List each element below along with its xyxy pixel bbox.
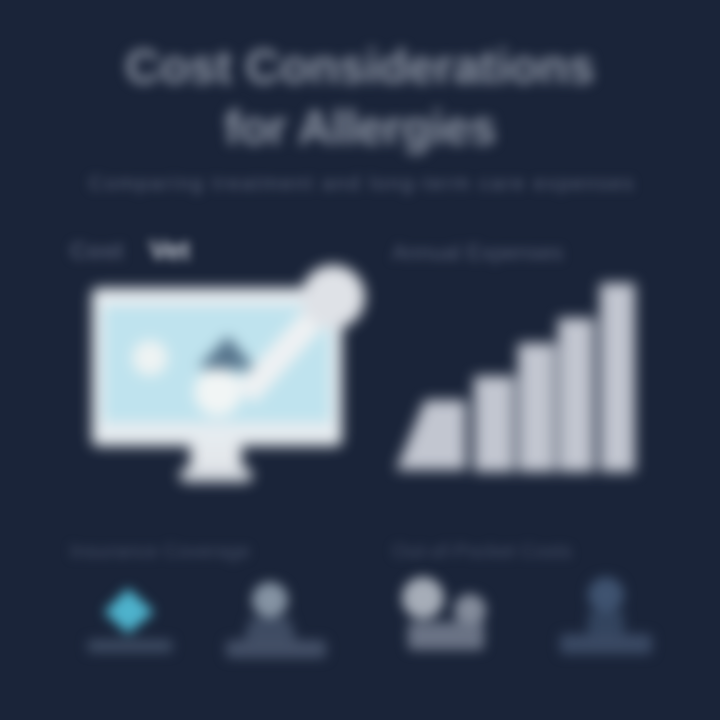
title: Cost Considerations — [125, 41, 595, 94]
icon: blue item — [84, 582, 176, 657]
title: for Allergies — [224, 102, 496, 155]
icon: monitor with check — [80, 254, 376, 493]
icon: person — [222, 574, 330, 663]
heading: left chart: Cost Vet — [70, 235, 190, 265]
heading: right chart: Annual Expenses — [392, 240, 563, 265]
heading: bottom right: Out-of-Pocket Costs — [392, 541, 572, 563]
subtitle: Comparing treatment and long-term care expenses — [89, 173, 635, 195]
heading: bottom left: Insurance Coverage — [70, 541, 250, 563]
icon: user outline — [556, 572, 656, 659]
bar chart — [389, 272, 646, 483]
icon: pills — [394, 569, 493, 658]
title — [120, 41, 600, 162]
